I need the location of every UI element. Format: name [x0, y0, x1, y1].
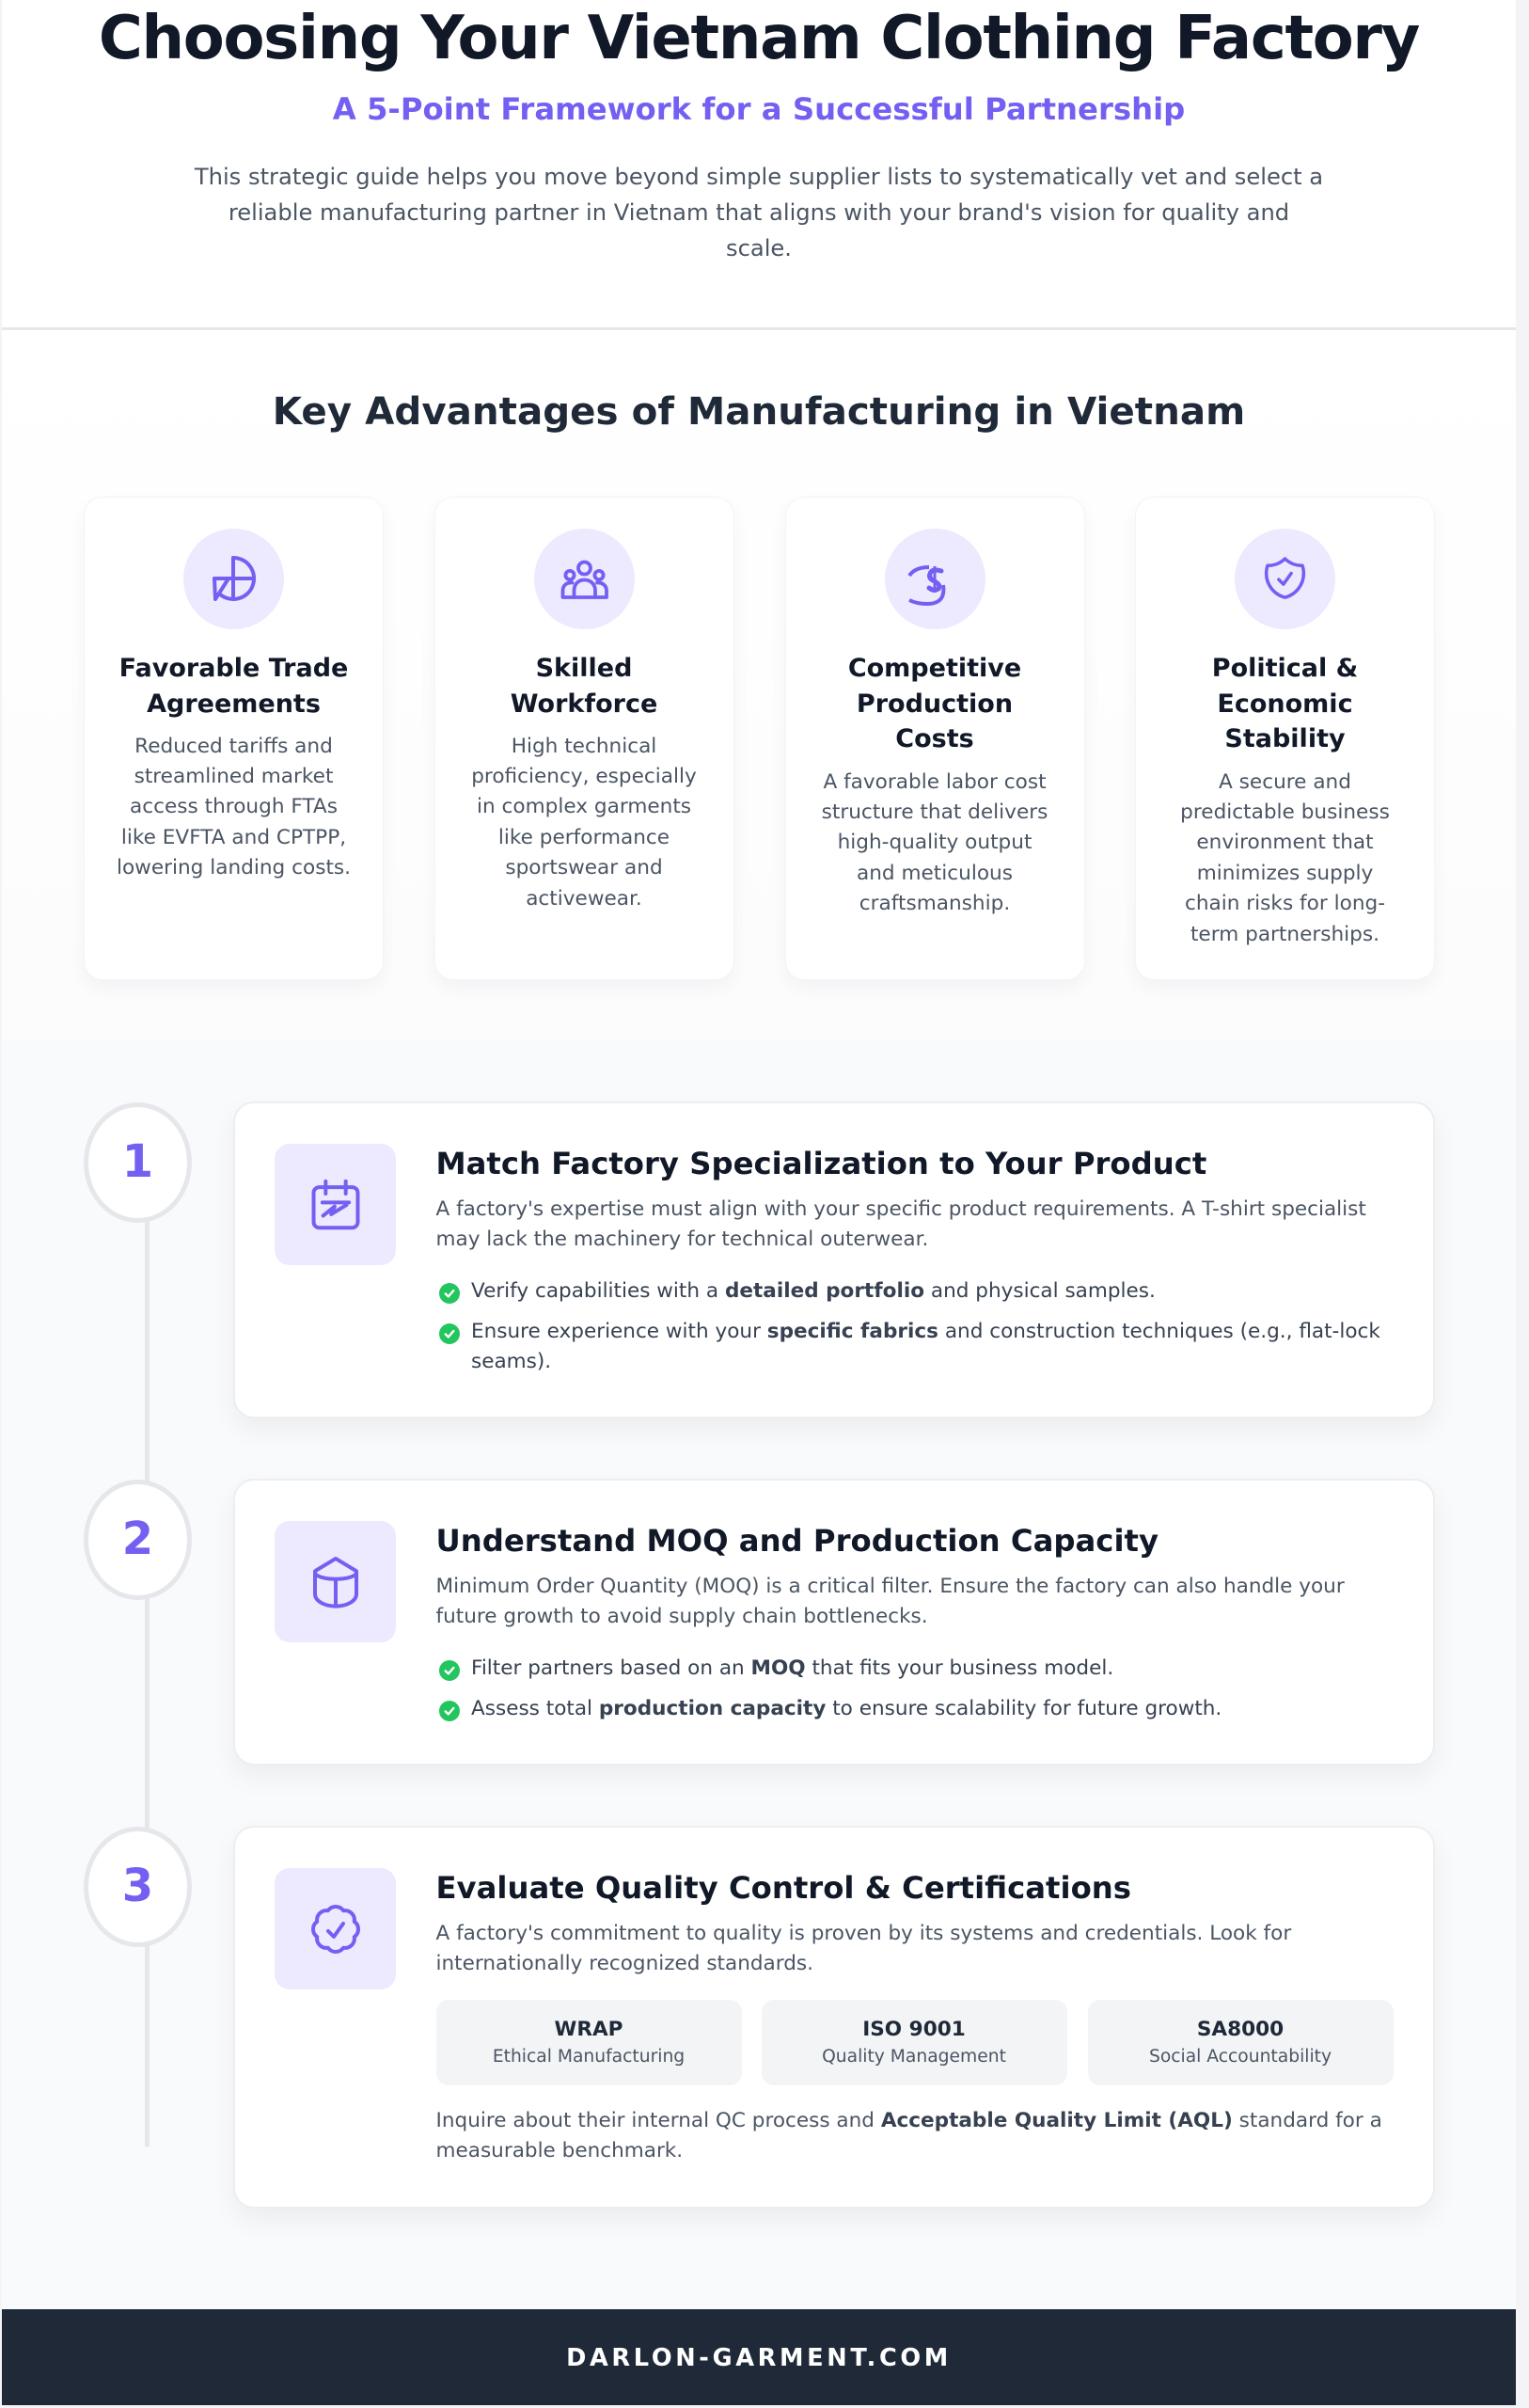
title: Choosing Your Vietnam Clothing Factory	[99, 4, 1419, 73]
icon: cube	[275, 1521, 396, 1642]
card text: like performance	[498, 826, 670, 849]
card text: lowering landing costs.	[117, 856, 351, 879]
icon: people	[534, 529, 634, 628]
intro paragraph: reliable manufacturing partner in Vietnam that aligns with your brand's vision for quality and	[229, 199, 1289, 226]
card text	[117, 734, 351, 879]
card text: activewear.	[526, 887, 642, 911]
icon: check badge	[275, 1868, 396, 1989]
step number 3: 3	[122, 1860, 153, 1912]
panel: key advantages	[2, 330, 1516, 1039]
card text: high-quality output	[838, 831, 1032, 854]
icon: pie chart	[183, 529, 284, 628]
card text: High technical	[512, 734, 656, 758]
card text	[822, 769, 1048, 915]
card text: chain risks for long-	[1185, 892, 1385, 915]
cert description: Ethical Manufacturing	[493, 2047, 685, 2066]
step description	[436, 1922, 1292, 1975]
icon: cost coin	[884, 529, 985, 628]
step description: A factory's expertise must align with your specific product requirements. A T-shirt specialist	[436, 1197, 1366, 1221]
bullet: Assess total production capacity to ensure scalability for future growth.	[471, 1697, 1222, 1720]
certification: WRAP	[436, 2000, 741, 2085]
card text: A favorable labor cost	[823, 769, 1047, 794]
bullet: Filter partners based on an MOQ that fits your business model.	[471, 1656, 1113, 1680]
step description: A factory's commitment to quality is proven by its systems and credentials. Look for	[436, 1922, 1291, 1945]
card title: Competitive	[848, 654, 1021, 683]
intro paragraph: This strategic guide helps you move beyond simple supplier lists to systematically vet and select a	[195, 164, 1323, 190]
card title: Costs	[895, 724, 974, 753]
subtitle: A 5-Point Framework for a Successful Partnership	[333, 91, 1185, 127]
step description: future growth to avoid supply chain bottlenecks.	[436, 1605, 928, 1628]
card title	[119, 654, 348, 719]
card text: craftsmanship.	[859, 892, 1010, 915]
footer: DARLON-GARMENT.COM	[566, 2344, 952, 2372]
card title	[511, 654, 657, 719]
card: political and economic stability	[1135, 497, 1435, 980]
bullet: seams).	[471, 1350, 551, 1373]
card text: and meticulous	[857, 862, 1013, 885]
card title	[848, 654, 1021, 753]
check icon	[439, 1283, 460, 1304]
cert name: ISO 9001	[862, 2018, 966, 2041]
icon: calendar trend	[275, 1144, 396, 1265]
panel: steps background	[2, 1039, 1516, 2309]
card text: term partnerships.	[1190, 923, 1379, 946]
bullet: Ensure experience with your specific fabrics and construction techniques (e.g., flat-lock	[471, 1320, 1380, 1343]
step description: may lack the machinery for technical outerwear.	[436, 1228, 928, 1251]
certification: SA8000	[1087, 2000, 1394, 2085]
card text: structure that delivers	[822, 800, 1048, 824]
step number 2: 2	[122, 1513, 153, 1565]
card text: in complex garments	[477, 795, 691, 818]
check icon	[439, 1323, 460, 1344]
cert description: Quality Management	[822, 2047, 1006, 2066]
footer	[2, 2309, 1516, 2405]
step description: internationally recognized standards.	[436, 1952, 813, 1975]
closing note: Inquire about their internal QC process and Acceptable Quality Limit (AQL) standard for a	[436, 2109, 1382, 2132]
step card 1	[233, 1101, 1435, 1418]
cert name: WRAP	[555, 2018, 623, 2041]
card title: Economic	[1217, 689, 1353, 719]
card text: like EVFTA and CPTPP,	[121, 826, 346, 849]
card: competitive production costs	[784, 497, 1085, 980]
card title: Workforce	[511, 689, 657, 719]
closing note	[436, 2109, 1382, 2162]
card title: Stability	[1224, 724, 1346, 753]
card text	[471, 734, 697, 911]
card text: streamlined market	[134, 765, 333, 788]
card text: A secure and	[1219, 769, 1351, 794]
cert description: Social Accountability	[1149, 2047, 1332, 2066]
timeline line	[145, 1213, 149, 2147]
card text	[1180, 769, 1390, 946]
card title	[1212, 654, 1358, 753]
card title: Agreements	[147, 689, 321, 719]
bullet	[471, 1320, 1380, 1373]
card title: Political &	[1212, 654, 1358, 683]
card text: sportswear and	[505, 856, 663, 879]
card text: environment that	[1196, 831, 1374, 854]
certification: ISO 9001	[762, 2000, 1066, 2085]
step title: Evaluate Quality Control & Certifications	[436, 1870, 1131, 1906]
intro paragraph	[194, 164, 1323, 261]
cert name: SA8000	[1197, 2018, 1284, 2041]
step number 1: 1	[122, 1135, 153, 1188]
step number 3	[84, 1827, 192, 1947]
step title: Understand MOQ and Production Capacity	[436, 1523, 1159, 1559]
step number 2	[84, 1480, 192, 1600]
card text: access through FTAs	[130, 795, 338, 818]
step description	[436, 1575, 1345, 1628]
heading: key advantages: Key Advantages of Manufacturing in Vietnam	[273, 388, 1245, 434]
step title: Match Factory Specialization to Your Product	[436, 1146, 1206, 1181]
card text: Reduced tariffs and	[134, 734, 333, 758]
card title: Favorable Trade	[119, 654, 348, 683]
card text: minimizes supply	[1197, 862, 1373, 885]
card text: proficiency, especially	[471, 765, 697, 788]
card text: predictable business	[1180, 800, 1390, 824]
check icon	[439, 1660, 460, 1681]
step description: Minimum Order Quantity (MOQ) is a critical filter. Ensure the factory can also handle your	[436, 1575, 1345, 1598]
card title: Production	[857, 689, 1013, 719]
step number 1	[84, 1102, 192, 1223]
step card 2	[233, 1479, 1435, 1765]
card: favorable trade agreements	[84, 497, 384, 980]
closing note: measurable benchmark.	[436, 2139, 683, 2162]
card: skilled workforce	[434, 497, 733, 980]
bullet: Verify capabilities with a detailed portfolio and physical samples.	[471, 1279, 1156, 1303]
step description	[436, 1197, 1366, 1251]
icon: shield	[1235, 529, 1335, 628]
intro paragraph: scale.	[726, 235, 792, 261]
check icon	[439, 1701, 460, 1721]
panel: header	[2, 0, 1516, 330]
card title: Skilled	[536, 654, 632, 683]
step card 3	[233, 1826, 1435, 2209]
